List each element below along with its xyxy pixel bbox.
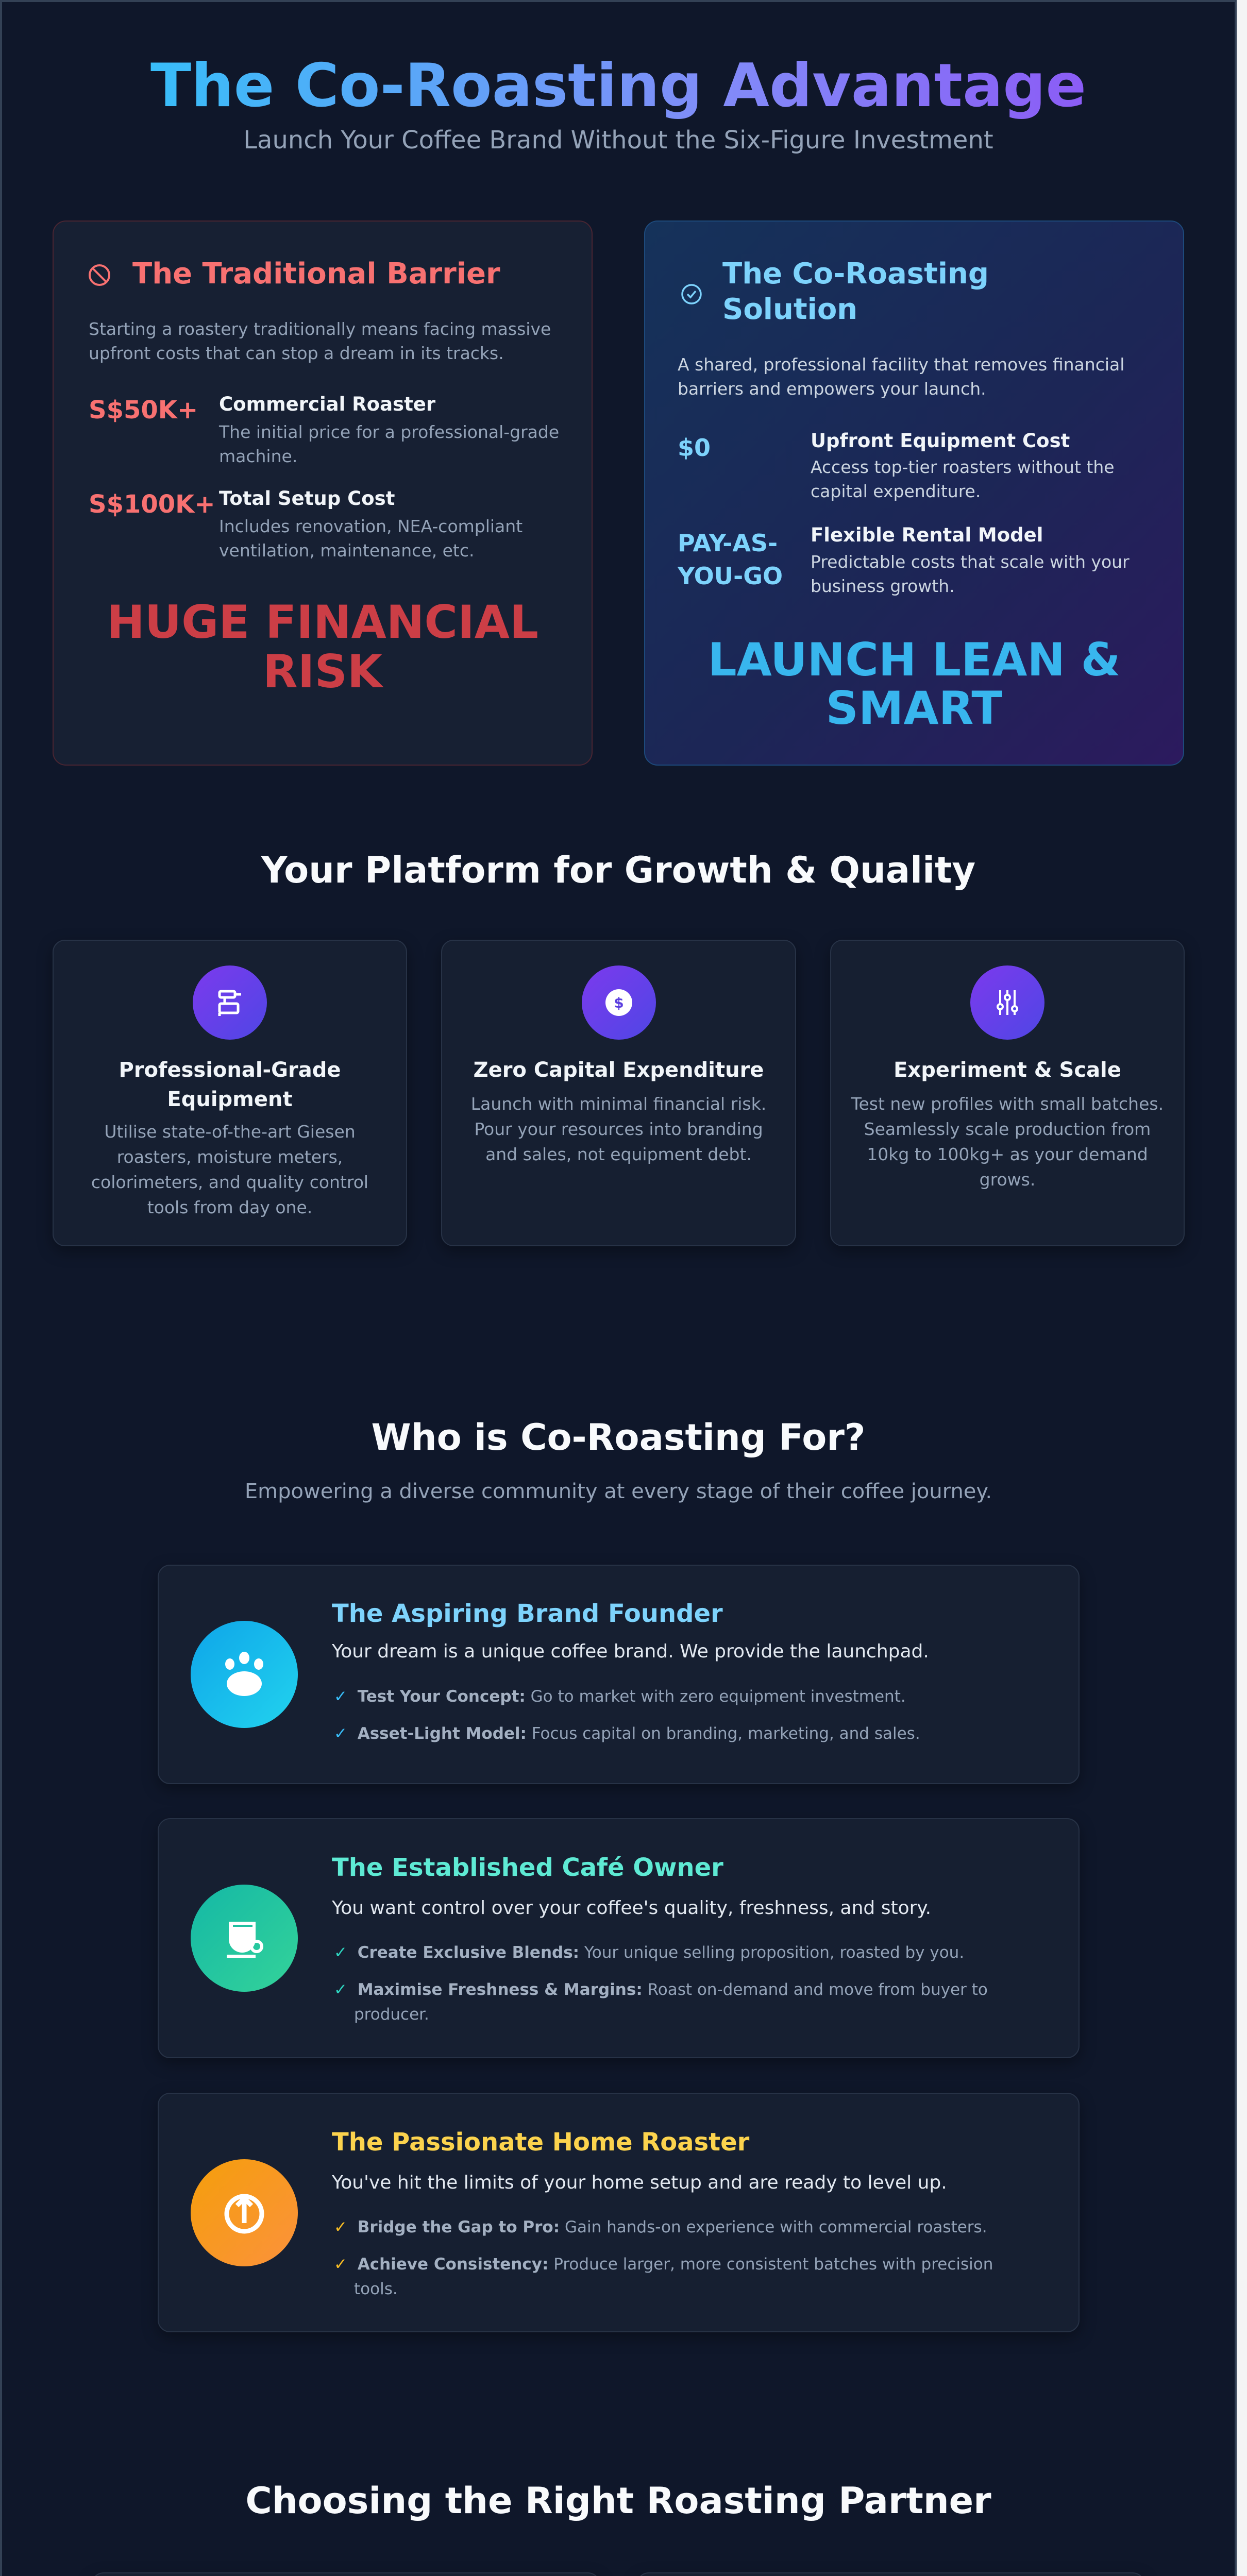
callout: launch lean: SMART [826, 682, 1002, 735]
stat: pay as you go: PAY-AS- [678, 529, 778, 557]
stat: pay as you go: YOU-GO [678, 562, 783, 590]
title: The Co-Roasting Advantage [150, 51, 1086, 121]
description [851, 1094, 1164, 1190]
bullets: ✓ Bridge the Gap to Pro: Gain hands-on experience with commercial roasters. [334, 2218, 987, 2236]
title: Equipment [167, 1088, 293, 1111]
stat: setup: S$100K+ [89, 490, 215, 519]
intro text: upfront costs that can stop a dream in its tracks. [89, 343, 504, 363]
description [91, 1122, 368, 1217]
stat: roaster: machine. [219, 446, 297, 466]
card: zero capex [441, 940, 796, 1246]
intro text: A shared, professional facility that removes financial [678, 354, 1124, 375]
heading: who is it for: Who is Co-Roasting For? [372, 1416, 865, 1459]
description: Launch with minimal financial risk. [471, 1094, 766, 1114]
card: checklist [636, 2572, 1145, 2576]
bullets: producer. [354, 2005, 429, 2024]
intro text: barriers and empowers your launch. [678, 379, 986, 399]
stat: pay as you go: Flexible Rental Model [811, 524, 1043, 546]
bullets: ✓ Test Your Concept: Go to market with zero equipment investment. [334, 1687, 906, 1706]
icon: check circle [681, 284, 702, 304]
stat: $0 [678, 430, 1115, 501]
bullets: ✓ Maximise Freshness & Margins: Roast on-demand and move from buyer to [334, 1980, 988, 1999]
panel: traditional barrier [53, 221, 593, 766]
stat: setup: Total Setup Cost [219, 487, 395, 510]
stat: roaster: The initial price for a professional-grade [219, 422, 559, 442]
description: Utilise state-of-the-art Giesen [104, 1122, 356, 1142]
icon: sliders [970, 965, 1044, 1040]
title: The Aspiring Brand Founder [332, 1599, 723, 1628]
stat: pay as you go: Predictable costs that scale with your [811, 552, 1130, 572]
title: Zero Capital Expenditure [474, 1058, 764, 1082]
title: Professional-Grade [119, 1058, 341, 1082]
callout: huge risk: HUGE FINANCIAL [107, 596, 538, 649]
bullets: ✓ Create Exclusive Blends: Your unique selling proposition, roasted by you. [334, 1943, 964, 1962]
bullets [334, 1943, 988, 2024]
callout: launch lean [708, 633, 1120, 735]
intro text [678, 354, 1124, 399]
stat: setup: ventilation, maintenance, etc. [219, 540, 474, 561]
description: colorimeters, and quality control [91, 1172, 368, 1192]
stat: setup: Includes renovation, NEA-compliant [219, 516, 523, 536]
heading: choosing partner: Choosing the Right Roasting Partner [245, 2480, 991, 2522]
icon: prohibited [89, 264, 110, 286]
bullets [334, 1687, 920, 1743]
description: Test new profiles with small batches. [851, 1094, 1164, 1114]
heading [722, 257, 989, 326]
bullets: ✓ Achieve Consistency: Produce larger, more consistent batches with precision [334, 2255, 993, 2274]
stat: $0: Upfront Equipment Cost [811, 430, 1070, 452]
bullets [334, 2218, 993, 2298]
title: Experiment & Scale [894, 1058, 1121, 1082]
title: The Passionate Home Roaster [332, 2128, 749, 2157]
persona: brand founder [158, 1565, 1080, 1784]
icon: coin: $ [614, 994, 624, 1011]
stat: $0: Access top-tier roasters without the [811, 457, 1115, 477]
stat: roaster: Commercial Roaster [219, 393, 435, 415]
title: The Established Café Owner [332, 1853, 723, 1882]
title [119, 1058, 341, 1111]
stat: setup [89, 487, 523, 561]
intro text: Starting a roastery traditionally means facing massive [89, 319, 551, 339]
intro text [89, 319, 551, 363]
description: Pour your resources into branding [474, 1119, 763, 1139]
callout: launch lean: LAUNCH LEAN & [708, 633, 1120, 686]
description [471, 1094, 766, 1164]
persona: cafe owner [158, 1818, 1080, 2058]
stat: pay as you go: business growth. [811, 576, 955, 596]
subheading: Empowering a diverse community at every stage of their coffee journey. [245, 1480, 992, 1503]
subtitle: Your dream is a unique coffee brand. We provide the launchpad. [332, 1641, 929, 1662]
description: roasters, moisture meters, [117, 1147, 343, 1167]
icon: cup [191, 1885, 298, 1992]
icon: coin [582, 965, 656, 1040]
description: 10kg to 100kg+ as your demand [867, 1144, 1148, 1164]
callout: huge risk: RISK [263, 645, 382, 698]
heading: The Traditional Barrier [132, 257, 500, 291]
description: grows. [980, 1170, 1035, 1190]
stat: roaster: S$50K+ [89, 396, 198, 425]
stat: pay as you go [677, 524, 1130, 596]
description: tools from day one. [147, 1197, 312, 1217]
bullets: tools. [354, 2280, 398, 2298]
heading: The Co-Roasting [722, 257, 989, 291]
stat: $0: $0 [678, 434, 711, 462]
persona: home roaster [158, 2093, 1080, 2332]
description: and sales, not equipment debt. [485, 1144, 752, 1164]
description: Seamlessly scale production from [864, 1119, 1151, 1139]
card: professional equipment [53, 940, 407, 1246]
card: experiment & scale [830, 940, 1185, 1246]
subtitle: You've hit the limits of your home setup and are ready to level up. [332, 2172, 947, 2193]
icon: level up [191, 2159, 298, 2266]
heading: platform: Your Platform for Growth & Quality [261, 849, 975, 891]
subtitle: You want control over your coffee's quality, freshness, and story. [332, 1897, 931, 1919]
callout: huge risk [107, 596, 538, 698]
stat: $0: capital expenditure. [811, 481, 981, 501]
icon: paw [191, 1621, 298, 1728]
card: more than a rental [91, 2572, 600, 2576]
subtitle: Launch Your Coffee Brand Without the Six-Figure Investment [243, 126, 993, 155]
icon: roaster [193, 965, 267, 1040]
heading: Solution [722, 293, 857, 326]
panel: co-roasting solution [644, 221, 1184, 766]
bullets: ✓ Asset-Light Model: Focus capital on branding, marketing, and sales. [334, 1724, 920, 1743]
stat: roaster [89, 393, 559, 466]
